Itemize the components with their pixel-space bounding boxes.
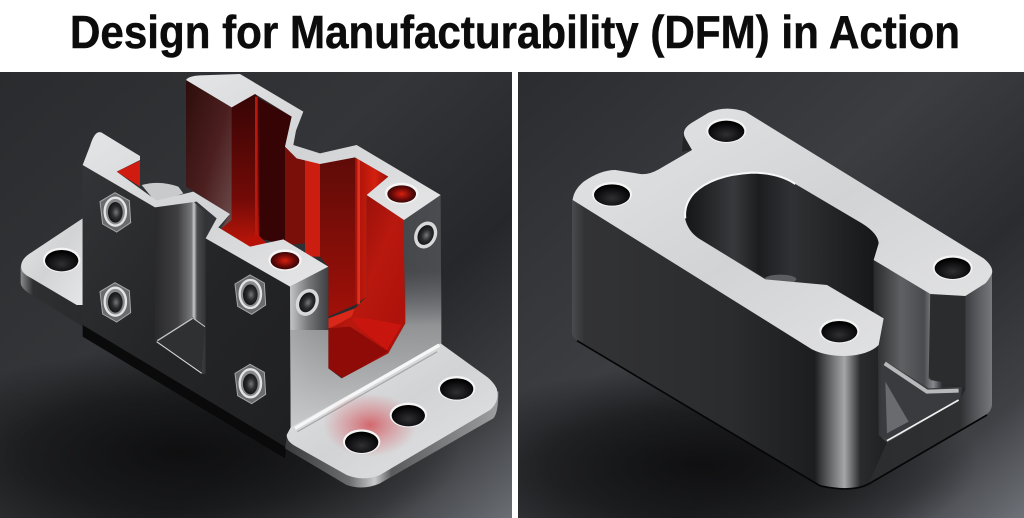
top plate xyxy=(573,109,992,356)
floor shadow xyxy=(518,383,948,518)
slot floor highlights xyxy=(157,317,205,373)
pocket floor glint xyxy=(764,274,796,282)
pocket rim highlight xyxy=(685,173,795,218)
base plate right xyxy=(285,343,498,487)
front wall slot xyxy=(155,201,206,374)
notch right face xyxy=(929,294,965,387)
front wall xyxy=(82,218,290,446)
block drawing xyxy=(572,109,992,489)
title: Design for Manufacturability (DFM) in Action xyxy=(70,6,960,58)
block side face xyxy=(924,274,992,444)
plate mounting holes xyxy=(592,118,973,343)
small rear red window xyxy=(117,161,140,187)
block front face xyxy=(572,198,887,488)
top holes xyxy=(268,183,418,271)
panel: simplified part xyxy=(518,72,1024,518)
red interior walls xyxy=(186,80,405,378)
top rim, front xyxy=(83,132,328,287)
bracket drawing xyxy=(21,74,498,487)
oblong pocket xyxy=(685,173,879,313)
top rim, back xyxy=(186,74,441,220)
floor shadow xyxy=(0,368,422,518)
panel background xyxy=(518,72,1024,518)
panel: complex part with red problem areas xyxy=(0,72,512,518)
right side faces xyxy=(290,195,441,428)
base front dark edge xyxy=(83,322,287,458)
panel background xyxy=(0,72,512,518)
block bottom edge xyxy=(577,341,987,489)
divider xyxy=(512,72,518,518)
base plate left wing xyxy=(21,218,83,327)
hex bolts xyxy=(100,193,266,404)
notch floor xyxy=(880,360,962,441)
rear face sliver xyxy=(682,130,692,152)
side holes xyxy=(296,222,438,316)
rear cylinder boss xyxy=(142,183,183,203)
notch interior xyxy=(874,260,965,443)
